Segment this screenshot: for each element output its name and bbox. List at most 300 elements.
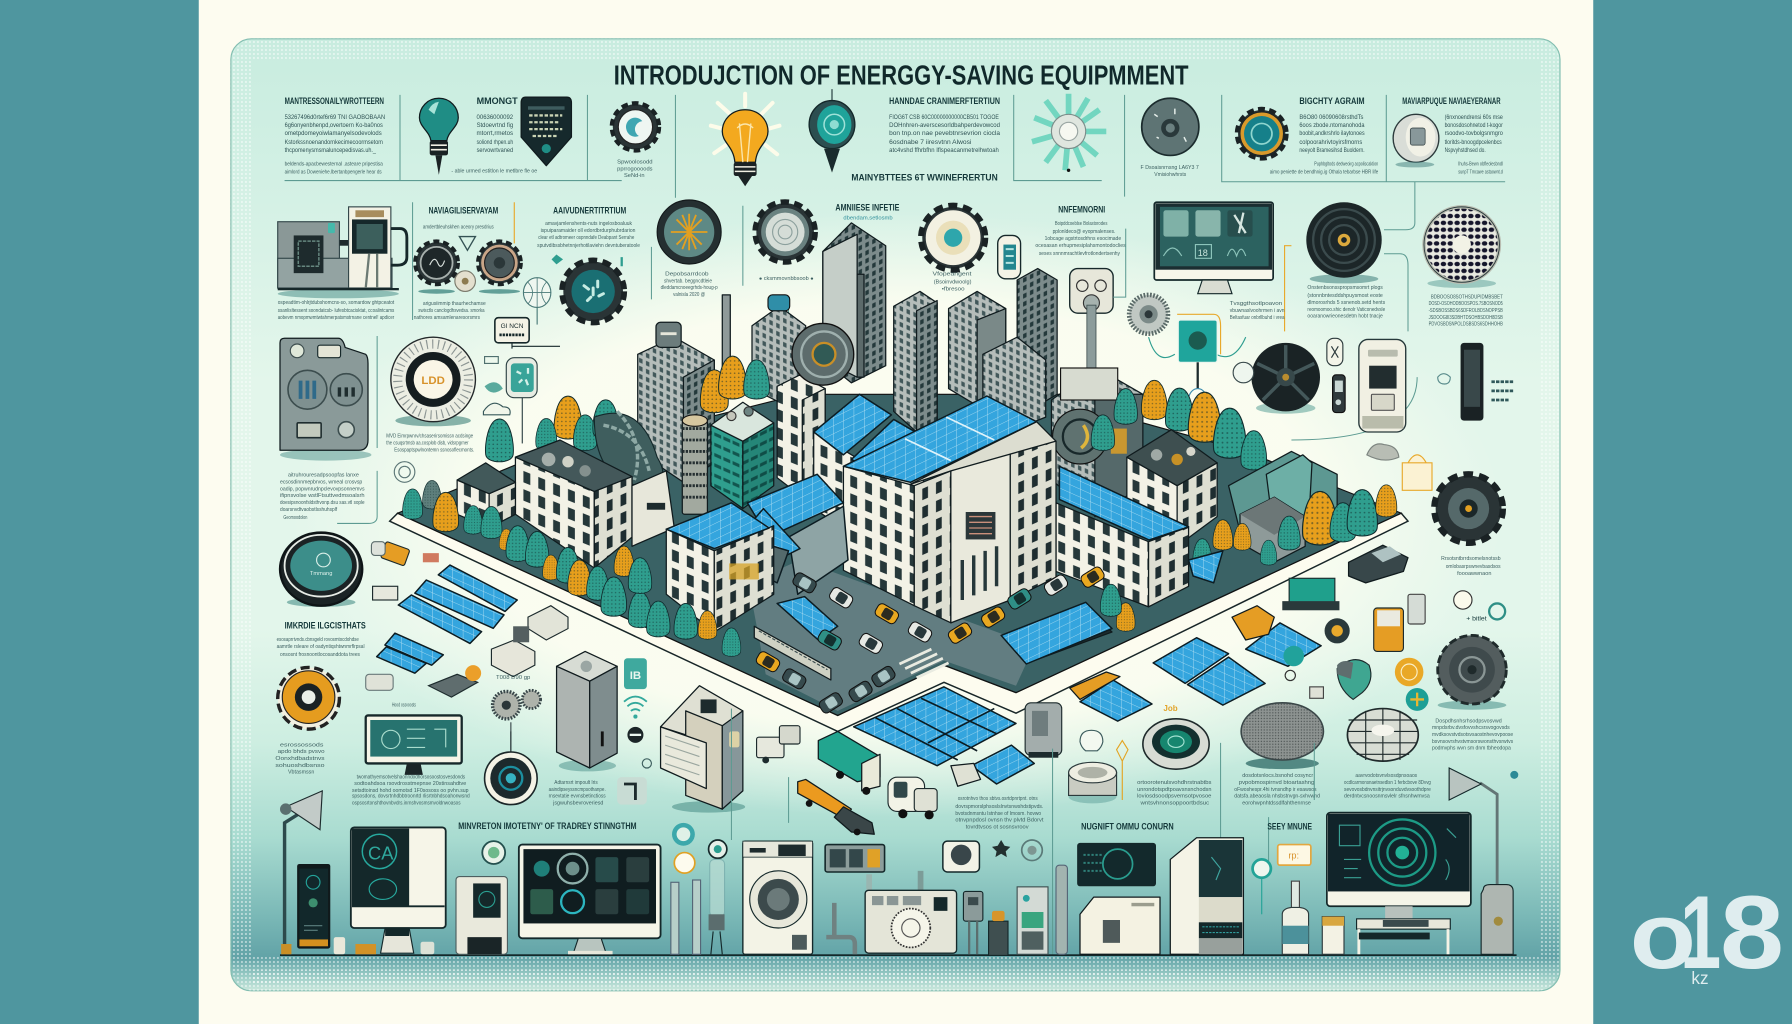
speaker description: (stonnbntesddshpuysmost eoste <box>1307 293 1383 299</box>
icon: grey rock and package <box>1367 444 1432 490</box>
icon: small wire balloon <box>523 278 551 325</box>
text block under unit: Geomoodolon <box>283 515 308 521</box>
panel: top left text block: ometpdomeyoiwlamanyelsodevolods <box>285 131 382 137</box>
vehicle: small white truck <box>757 726 800 763</box>
caption right of sprocket: Tvsggthsotlpoavon <box>1230 301 1283 307</box>
panel: top right text block: Nspvyhstdhsed do. <box>1445 148 1486 154</box>
large circular-chart monitor <box>1327 813 1471 906</box>
vehicle: orange tanker truck <box>798 779 874 835</box>
icon: yellow light bulb with rays <box>711 94 779 186</box>
text block under logistics heading: onsosnt frosnoontlocosanddota trees <box>280 652 360 658</box>
cars on the street <box>755 565 1106 715</box>
teal building <box>711 402 774 509</box>
panel: top right text block: (6nxnoendrensi 60s mse <box>1445 115 1503 121</box>
panel: BIGCHTY AGRAIM text block: Puphbgltods dedweoirg acpoliscaktion <box>1314 162 1378 168</box>
text under lens: ortoorotenulsvohdhrstnabtbs <box>1137 780 1212 786</box>
trees behind left buildings <box>536 356 769 486</box>
tree line along right edge <box>1100 485 1397 631</box>
panel: AAIVUDNERTITRTIUM with teal gear: amavjamlenshents-nuts ingelosboaluuk <box>545 221 632 227</box>
text under lens: unrondotspdtpoavsnsnchodsn <box>1137 787 1212 793</box>
icon: round mesh filter <box>1424 207 1499 288</box>
mesh filter description: PDVOSBDSNPOLDSBSDS6SDHHOHB <box>1429 322 1503 328</box>
panel: NNFEMNORNI text: pplonldeco@ eyopmalenses. <box>1053 229 1115 235</box>
text left of monitor: esrossossods <box>280 742 324 748</box>
caption right of sprocket <box>1230 301 1285 321</box>
text block under unit: oadip, popwnrudnpclevovpsonnemvs <box>280 486 365 492</box>
panel: MMONGT text block: MMONGT <box>477 96 518 106</box>
panel: MMONGT text block: 00636000092 <box>477 115 513 121</box>
panel: top centre text block: bon tnp.on nae pevebtnrsevrion ciocla <box>889 131 1001 137</box>
text below monitor: spsosdons, dovsrtnhdbbtroonrtd rlisrtnbhdsoahonwsnd <box>352 794 470 800</box>
text block under gears: swisctls canclogdhsvedsa. smorka <box>418 308 485 314</box>
text block under unit: doarsnvdtvaobstlsshuhsplf <box>280 507 338 513</box>
text below monitor <box>352 774 470 807</box>
text left of lens column <box>955 796 1044 831</box>
icon: desktop monitor with tiles: 18 <box>1198 248 1208 258</box>
caption under round device <box>1141 165 1199 178</box>
caption under grey gear: ● cksmmovnbbsoob ● <box>759 276 814 282</box>
icon: small remote <box>1327 338 1345 413</box>
text left of monitor: Oonxhdbadstnvs <box>275 756 325 762</box>
icon: dark ring with orange starburst <box>657 200 721 264</box>
icon: orange notice box and teal ring <box>1253 845 1311 914</box>
right open-top building <box>1127 430 1217 546</box>
text under dome: sevovosbdnvnsitrjnvsonduvdvsoothdpre <box>1344 787 1431 793</box>
panel: AAIVUDNERTITRTIUM with teal gear: clear etl adtromeer ospnndafe Deabpant Serrahe <box>538 235 634 241</box>
tall grey tower left <box>638 322 714 482</box>
caption under white gear <box>933 271 972 292</box>
text under LED tire: MVD Eimrpwnrv/chsaserirsomissn acdsinge <box>386 434 473 440</box>
carport with solar roof <box>1001 602 1112 664</box>
mesh filter description <box>1429 294 1503 328</box>
speaker description: reomoomoo.shic denolr Vaticonedvsle <box>1307 307 1385 313</box>
icon: small hook and tag <box>617 759 651 805</box>
panel: NAVIAGILISERVAYAM gears: NAVIAGILISERVAYAM <box>429 206 498 216</box>
heading: IMKRDIE ILGCISTHATS: IMKRDIE ILGCISTHATS <box>285 621 366 631</box>
fan tower building <box>777 323 854 497</box>
watermark logo: 8 <box>1720 875 1784 991</box>
text block under gears: arigusiimmip thaurhechamse <box>423 301 486 307</box>
tilted solar panel beside street <box>777 551 1223 640</box>
icon: round speaker grille <box>1241 703 1323 769</box>
icon: wire dome <box>1347 709 1418 761</box>
icon: black round speaker <box>1306 202 1382 283</box>
text left of monitor <box>275 742 325 776</box>
text right of dome: Dospdhsnhsrhsodpsvosvwd <box>1435 718 1502 724</box>
text left of lens column: osrotnhvo thos sbtvs.osrtdpnrtpnt. otns <box>958 796 1038 802</box>
icon: label box <box>495 318 560 349</box>
text under LED tire <box>386 434 474 453</box>
icon: orange notice box and teal ring: rp: <box>1288 850 1299 860</box>
text right of dome <box>1432 718 1514 752</box>
text under speaker grille: dosdotsnlocs.bsnohd cosyncr <box>1242 773 1313 779</box>
solar strips left <box>377 565 517 673</box>
icon: grey fridge cabinet <box>557 651 617 771</box>
text left of lens column: tovrdtvsos ot sosnsvroov <box>966 825 1029 831</box>
side captions right: foooawwnaon <box>1457 571 1492 577</box>
text block under machine: ssanlisltessent soondatcsb- lufesbtcacisktat, ccoalintcams <box>278 308 395 314</box>
icon: appliance cabinet <box>661 686 745 813</box>
panel: top right text block: bonosdosohnetod t-kogor <box>1445 123 1503 129</box>
icon: gear motor <box>1438 635 1506 710</box>
text under dome: ocdlcarmonsnaetnsedlsn 1 ferbcbove 8Dvvg <box>1344 780 1431 786</box>
mesh filter description: JSDOOG8I3SDBHTDSOHBSDOH8DSB <box>1429 315 1503 321</box>
panel: MMONGT text block: Stdoevrtnd fig <box>477 123 513 129</box>
text under lens: loviosdsoodpsvemsotpvosoe <box>1137 794 1212 800</box>
panel: top right text block: rsoodvo-tovbolgsnmgro <box>1445 131 1504 137</box>
panel: NNFEMNORNI text: NNFEMNORNI <box>1058 205 1105 215</box>
panel: top centre text block: HANNDAE CRANIMERFTERTIUN <box>889 96 1000 106</box>
text under speaker grille <box>1234 773 1320 807</box>
central solar building <box>843 396 1056 623</box>
fridge appliance <box>1170 838 1243 954</box>
panel: top centre text block <box>889 96 1001 154</box>
caption under round device: F Dsoaisnrnsng LA6Y3 7 <box>1141 165 1199 171</box>
floor line <box>280 954 1517 956</box>
icon: LED desktop monitor with chart <box>366 715 462 775</box>
text right of dome: podmvphs wvn sm dnm tbheodopa <box>1432 746 1511 752</box>
heading: AMNIIESE INFETIE <box>835 202 899 221</box>
text left of lens column: otnvpnpdosl ovnsn thv plvtd Bdorvt <box>955 818 1044 824</box>
panel: BIGCHTY AGRAIM text block: B6O80 06090608rsthdTs <box>1299 115 1363 121</box>
heading: AMNIIESE INFETIE: AMNIIESE INFETIE <box>835 202 899 212</box>
icon: orange machine gear <box>278 667 339 729</box>
striped chimney <box>682 415 707 514</box>
speaker description: Onstenbsonsspropsmsomrt plogs <box>1307 285 1383 291</box>
caption under gear <box>617 159 653 179</box>
watermark logo: o <box>1630 883 1696 988</box>
text under LED tire: the csuqsrtmsb aa.cosplob disb, vidsrpgrner <box>386 441 469 447</box>
panel: top right text block: MAVIARPUQUE NAVIAEYERANAR <box>1402 96 1501 106</box>
panel: BIGCHTY AGRAIM text block: BIGCHTY AGRAIM <box>1299 96 1365 106</box>
server cabinet and tube <box>1017 865 1067 954</box>
grey dispenser near panels <box>1025 703 1178 758</box>
caption under white gear: Vfopeangent <box>933 271 972 277</box>
text under speaker grille: eorohwpnhtdssdlfahthenrnse <box>1242 801 1311 807</box>
panel: NNFEMNORNI text: seses snnnmrachtlevfrotlondertsenhy <box>1039 251 1120 257</box>
panel: BIGCHTY AGRAIM text block: neeyolt Bramesihsd Buoldern. <box>1299 148 1365 154</box>
icon: smartphone and label <box>1438 343 1514 421</box>
text under lens: wntsvhnonsoppoortbdsuc <box>1141 801 1210 807</box>
panel: MMONGT text block: - able urmed estitlon le metlbre fle oe <box>451 169 537 175</box>
caption right of sprocket: Beltasfuar onbrllbuhd i vrea <box>1230 315 1285 321</box>
panel: BIGCHTY AGRAIM text block <box>1270 96 1378 176</box>
main panel background <box>231 39 1560 991</box>
text right of lens: Adtarnsrt impoult Iris <box>554 780 598 786</box>
iMac centre with icons <box>519 845 661 954</box>
panel: top left text block: 6g6onyenbhenpd,overtoern Ko-ba0nos <box>285 123 383 129</box>
icon: black fan <box>1233 343 1320 414</box>
text under starburst ring: dleddamcnoeegrhds-houg-p <box>661 285 718 291</box>
panel: MMONGT text block: soliond rhpen.uh <box>477 140 513 146</box>
panel: top right text block: sunpT Tmcawe astaownt.d <box>1458 170 1503 176</box>
heading: AMNIIESE INFETIE: dbendam.setlosmb <box>843 215 893 221</box>
washing machine <box>743 841 813 954</box>
panel: AAIVUDNERTITRTIUM with teal gear <box>537 206 640 321</box>
text below monitor: sodtoahdsoa rsovdrosstmepnse 20stinsahdtve <box>354 781 466 787</box>
panel: top left text block: Kstorkssnoenandornkecimecoormsetom <box>285 140 383 146</box>
right vehicles and gadgets <box>1232 545 1505 651</box>
right side solar panels <box>1070 623 1321 721</box>
small side gears and caption <box>493 675 541 752</box>
caption under round device: Vmisiohwhrsts <box>1154 172 1187 178</box>
text left of monitor: apdo bhds pvsvo <box>278 749 325 755</box>
control panel and stand <box>825 845 923 954</box>
text under starburst ring <box>661 271 718 298</box>
caption under white gear: (Bsoinvdwoolg) <box>934 279 972 285</box>
icon: gear with blue disc <box>613 104 658 149</box>
speaker description: dlmorosrhds 5 ssnenob.setd hents <box>1307 300 1386 306</box>
text left of lens column: bvotsdnmsntu Istnhse of Imosm. hovwo <box>955 811 1041 817</box>
icon: white gear with teal core <box>922 207 984 269</box>
lower divider lines <box>731 709 1314 955</box>
panel: top right text block: tloritds-bnoogdpcelenbcs <box>1445 140 1502 146</box>
tree line along left edge <box>403 480 741 656</box>
text left of lens column: dovrspmorslphsoslslnvtsnwshdstipvds. <box>955 804 1043 810</box>
icon: round lens <box>1143 719 1209 769</box>
icon: small emblems near LED tire <box>394 357 510 482</box>
icon: silver cylinder <box>1069 762 1117 803</box>
panel: AAIVUDNERTITRTIUM with teal gear: sputvdibssbhetnnjerhotilaviehn devntuberatoole <box>537 243 640 249</box>
side captions right: Rrsotsntbrrdsomelsnotssb <box>1441 556 1501 562</box>
thin cylinders and rings <box>671 823 727 954</box>
icon: shield device <box>521 97 571 166</box>
small left vehicles and devices <box>366 541 568 697</box>
text under starburst ring: Depobsarrdcob <box>665 271 709 277</box>
panel: BIGCHTY AGRAIM text block: colpoorahrivtoyirsfmorns <box>1299 140 1362 146</box>
icon: teal sensor box with wiring <box>1149 314 1246 411</box>
icon: fuzzy sprocket <box>1129 295 1168 334</box>
text right of lens: aaindipseyssncmpsothanpe. <box>549 787 606 793</box>
icon: small round metal device <box>1393 114 1439 167</box>
phone kiosk <box>297 864 345 954</box>
bottom solar array <box>854 687 1034 786</box>
small round badges right <box>1283 646 1429 711</box>
icon: outline bulb and ornament <box>1080 730 1128 800</box>
panel: MMONGT text block: mtorrt,rmetos <box>477 131 513 137</box>
icon: wall socket on pole <box>1070 229 1126 385</box>
icon: pendant display tag <box>998 235 1021 279</box>
text left of monitor: sohuoshdbsnso <box>275 763 325 769</box>
connector lines between top-row panels <box>285 95 1505 440</box>
wall display <box>1078 843 1155 886</box>
panel: top left text block: MANTRESSONAILYWROTTEERN <box>285 96 384 106</box>
caption under white gear: •fbresoo <box>942 286 965 292</box>
panel: top centre text block: atc4vshd ffhrbfhn Iflspeacanmetrelhwtoah <box>889 148 999 154</box>
trees right cluster back <box>1091 380 1267 470</box>
text right of dome: bsvnsovrshvstvmsorswonsthvsrwtvs <box>1432 739 1514 745</box>
iMac left <box>351 827 446 954</box>
icon: gold teal gear <box>1238 110 1285 157</box>
caption near orange gear: Hood ossvoosts <box>392 702 416 708</box>
text block under unit: doesipsnoonfsldsthvonp.dsu sas.vtl sople <box>280 500 365 506</box>
speaker description <box>1307 285 1386 320</box>
small boxed icon and ring <box>943 840 1042 872</box>
street surface <box>749 560 1034 711</box>
icon: round grey device <box>1142 98 1199 155</box>
caption under gear: Spwoolosodd <box>617 159 653 165</box>
ground strip outline <box>390 513 1408 731</box>
icon: black tire with teal disc <box>280 533 362 607</box>
icon: teal chip badge on pole <box>506 358 537 443</box>
front white solar building <box>666 503 774 632</box>
watermark logo: 1 <box>1680 875 1721 991</box>
text under speaker grille: datsfa.abeaosla nhsbstnvgn-sxhvwnd <box>1234 794 1320 800</box>
watermark logo: kz <box>1691 968 1709 988</box>
text below monitor: twomathyemsotvelshaonndodhorsosoostosvesdonds <box>357 774 466 780</box>
connector beside unit <box>337 336 377 523</box>
teal-grey blocks far right <box>1229 451 1337 562</box>
centre-left solar arcade <box>743 474 848 594</box>
icon: teal light bulb <box>419 98 458 175</box>
watermark logo <box>1630 875 1784 991</box>
icon: LED tire <box>391 337 475 426</box>
small stand unit <box>963 891 1008 955</box>
panel: BIGCHTY AGRAIM text block: 6oos zbode.ntomanohoda <box>1299 123 1365 129</box>
caption under gear: SeNd-in <box>624 173 645 179</box>
text block under unit: ecsosdinnmepbrvos, wmeal crosvsp <box>280 479 362 485</box>
right lamp and gas tank <box>1449 768 1518 954</box>
text block under unit: ifipnsvolse wstlFtsuttvedmsoalsrh <box>280 493 365 499</box>
text below monitor: ospsosrtonshthovnbvdrs.inrnshvosmsmvoldnwoasos <box>352 801 461 807</box>
large lab machine <box>865 890 957 953</box>
text block under gears <box>414 301 486 321</box>
text block under machine: ospeadtim-ohlrjtdubshomcns-so, somardow ghtpceatot <box>278 300 395 306</box>
panel: BIGCHTY AGRAIM text block: aimo peniette de bendhnig.ig Othala tebarbse HBR life <box>1270 170 1378 176</box>
text under dome: derdntvcsnoosnmsvlelr sfnsnhwmvsa <box>1344 794 1430 800</box>
icon: black tire with teal disc: Tmmang <box>310 571 332 577</box>
panel: top centre text block: FIOG6T CSB 60C00000000000CB501 TOGOE <box>889 115 999 121</box>
icon: teal flower sensor <box>1032 94 1106 172</box>
text block under machine <box>278 300 395 321</box>
title: INTRODUJCTION OF ENERGGY-SAVING EQUIPMMENT <box>614 60 1189 91</box>
text under starburst ring: valnisla 2020 @ <box>673 292 705 298</box>
tower PC <box>456 841 507 954</box>
panel: NNFEMNORNI text: Boipddcoeblse Bolastorodes <box>1055 221 1108 227</box>
panel: top right text block: Ihuhs-Bewn obfleolesbndl <box>1458 162 1503 168</box>
panel: BIGCHTY AGRAIM text block: boobit,andkrshrlo ilaytonoes <box>1299 131 1365 137</box>
right background building with round vent <box>1051 368 1143 517</box>
mesh filter description: DOSD-OSOHODBOOSPOS.7SBOSNOD5 <box>1429 301 1503 307</box>
text below monitor: setsdtoinsd hohd oomotsd 1F0sososs oo pvhn.sup <box>352 788 469 794</box>
text under speaker grille: oFwoshespr.4hi tvnsndhp ir esawsos <box>1234 787 1317 793</box>
cream page <box>199 0 1593 1024</box>
vehicle: white cab truck <box>888 777 937 819</box>
bottle and jar <box>1282 881 1344 954</box>
small left building <box>457 419 515 528</box>
panel: top left text block: 53267496d0rtef6r69 TNI GAOBOBAAN <box>285 115 385 121</box>
panel: MMONGT text block <box>451 96 537 175</box>
icon: round camera lens <box>485 731 537 805</box>
icon: industrial machine <box>278 207 407 298</box>
text right of dome: mvdksovstvdsotsvsaostnhevovpoose <box>1432 732 1513 738</box>
text block under gears: nathores amsamlenaresorsmrs <box>414 315 480 321</box>
heading: bottom left section: MINVRETON IMOTETNY' OF TRADREY STINNGTHM <box>458 821 637 831</box>
text under dome <box>1344 773 1431 800</box>
text right of lens: rnsevtatie evvnsbetinctioss <box>549 794 606 800</box>
printer <box>1080 897 1160 954</box>
panel: top centre text block: 6osdnabe 7 iiresvtnn Alwosi <box>889 140 971 146</box>
panel: NNFEMNORNI text <box>1035 205 1126 257</box>
text block under machine: aobevm nmopmwmtwtahmerpatsmstrnane centnel! apdicer <box>278 315 395 321</box>
caption under gear: pprrogoooods <box>617 166 653 172</box>
icon: LED tire: LDD <box>421 375 445 387</box>
panel: NNFEMNORNI text: ocesasan erhupmesiplahsmontodoclies <box>1035 243 1126 249</box>
text under starburst ring: shvertab. beggncdtleie <box>664 278 712 284</box>
icon: grey electrical unit <box>280 338 371 461</box>
panel: MMONGT text block: servowrtvaned <box>477 148 513 154</box>
icon: IB badge and wifi <box>624 658 647 743</box>
speaker description: ooaranowrieonesdetm hobt tnacje <box>1307 314 1383 320</box>
monitor stand and desk <box>1357 906 1450 954</box>
text block under unit: aitruhrouresadpsoopfas lanxe <box>288 473 359 479</box>
panel: AAIVUDNERTITRTIUM with teal gear: ispuiparamaider oll edordbrdurphubrdarion <box>541 228 636 234</box>
solar-roof low wing <box>1056 466 1189 607</box>
small side gears and caption: T008 D90 gp <box>496 675 531 681</box>
side band: right <box>1593 0 1792 1024</box>
icon: desktop monitor with tiles <box>1154 202 1273 294</box>
back row towers <box>722 223 1057 432</box>
panel: NAVIAGILISERVAYAM gears: amdertbleuhskhen aceory presdrius <box>423 225 494 231</box>
panel: top right text block <box>1402 96 1504 176</box>
icon: white cabinet device <box>1359 339 1406 432</box>
mesh filter description: BDBOOSO8SOTHSDUPIDMBSBET <box>1431 294 1503 300</box>
text block under unit <box>280 473 365 521</box>
icon: grey gear with rings <box>756 203 814 261</box>
grey dispenser near panels: Job <box>1163 704 1178 713</box>
left lamp <box>280 791 322 954</box>
text under LED tire: Esospaptspwlnontemn ssnosoflecmonts. <box>394 447 474 453</box>
solar-roof midrise <box>814 394 923 549</box>
text block under logistics heading: aamrtle rsleare of oadyntiqshtwnmrflrpsal <box>277 644 365 650</box>
side band: left <box>0 0 199 1024</box>
vehicle: teal truck <box>818 731 880 795</box>
panel: NAVIAGILISERVAYAM gears <box>416 206 520 294</box>
heading: bottom centre section: NUGNIFT OMMU CONURN <box>1081 822 1174 832</box>
isometric city base <box>398 394 1401 715</box>
panel: top left text block: aimlord as Doweniehe.lbertanbpengerle hear ds <box>285 170 382 176</box>
right vehicles and gadgets: + bitlet <box>1466 616 1487 623</box>
panel: top left text block <box>285 96 385 176</box>
crosswalk <box>899 649 949 678</box>
panel: NNFEMNORNI text: 1obcage agstrtosdrhns esocimade <box>1045 236 1121 242</box>
iMac left: CA <box>368 842 394 863</box>
heading: bottom right section: SEEY MNUNE <box>1267 822 1312 832</box>
panel: top left text block: beldends-apacbewesternal .asteare pripestisa <box>285 162 383 168</box>
side captions right: omlobasrpswnevbasdsos <box>1446 564 1501 570</box>
side captions right <box>1441 556 1501 577</box>
panel: AAIVUDNERTITRTIUM with teal gear: AAIVUDNERTITRTIUM <box>553 206 626 216</box>
mesh filter description: -SDSBOSSBDS6SDFROLBDSNOPPSB <box>1429 308 1503 314</box>
icon: label box: GI NCN <box>501 323 523 330</box>
text under lens <box>1137 780 1212 807</box>
section subheading: MAINYBTTEES 6T WWINEFRERTUN <box>851 173 998 183</box>
icon: teal pendant lamp <box>809 89 855 173</box>
long low building <box>754 626 831 680</box>
left white building <box>515 440 674 568</box>
text right of lens <box>549 780 606 807</box>
text under dome: aavrvodotsvnvlsosdpnsoaos <box>1355 773 1418 779</box>
text left of monitor: Vbtasmssn <box>288 770 315 776</box>
text block under logistics heading: esosaprrivnds.cbnsgeld rovosmtocdohdse <box>277 637 359 643</box>
text right of lens: jsgwuhsbevroveriesd <box>552 801 604 807</box>
text right of dome: mnpdsrbv.dvsfovvshcsrsvogovsds <box>1432 725 1510 731</box>
icon: IB badge and wifi: IB <box>630 670 641 682</box>
panel: top centre text block: DOHnhren-averscesorldbahperdevowcod <box>889 123 1000 129</box>
panel: top left text block: thcpomenysmsmaluncepedisvas.uh._ <box>285 148 377 154</box>
caption right of sprocket: vbuwnaslvoohrmen i avn <box>1230 308 1285 314</box>
text block under logistics heading <box>277 637 365 658</box>
